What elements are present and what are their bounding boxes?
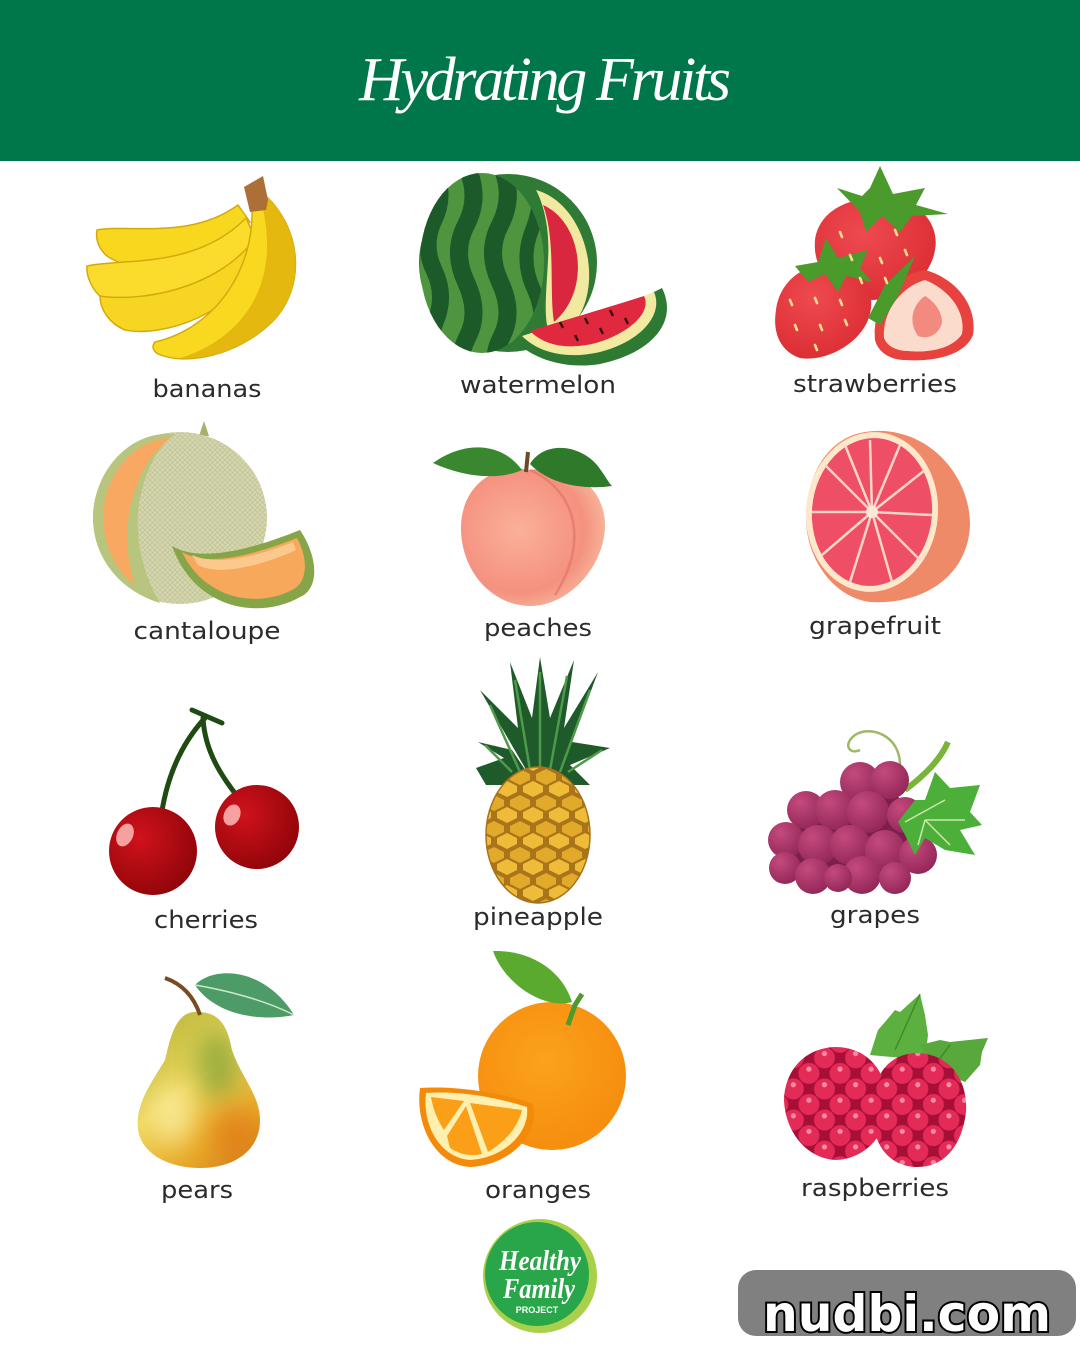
label: raspberries: raspberries [801, 1174, 949, 1202]
label: pears: pears [161, 1176, 233, 1204]
label: grapefruit: grapefruit [809, 612, 941, 640]
label: cantaloupe: cantaloupe [134, 617, 280, 645]
fruit: cherries [109, 710, 299, 934]
header banner [0, 0, 1080, 161]
fruit: pear [138, 973, 294, 1204]
logo: Healthy Family Project [483, 1219, 597, 1333]
label: grapes: grapes [830, 901, 920, 929]
fruit: strawberries [775, 166, 974, 398]
fruit: raspberries [784, 994, 988, 1202]
label: pineapple: pineapple [473, 903, 603, 931]
logo: Healthy Family Project: Family [502, 1273, 575, 1305]
logo: Healthy Family Project: PROJECT [516, 1305, 559, 1315]
watermark [738, 1270, 1076, 1343]
label: watermelon: watermelon [460, 371, 616, 399]
title: Hydrating Fruits [358, 46, 731, 114]
fruit: peach [433, 447, 612, 642]
fruit: grapes [768, 731, 982, 929]
label: strawberries: strawberries [793, 370, 957, 398]
label: oranges: oranges [485, 1176, 591, 1204]
fruit: grapefruit [799, 427, 970, 640]
fruit: oranges [419, 951, 626, 1204]
label: peaches: peaches [484, 614, 592, 642]
fruit: pineapple [473, 657, 610, 931]
fruit: cantaloupe [93, 421, 314, 645]
fruit: bananas [87, 176, 296, 403]
fruit: watermelon [419, 170, 667, 399]
label: bananas: bananas [152, 375, 262, 403]
watermark: nudbi.com [763, 1285, 1051, 1343]
logo: Healthy Family Project: Healthy [498, 1245, 581, 1277]
label: cherries: cherries [154, 906, 258, 934]
